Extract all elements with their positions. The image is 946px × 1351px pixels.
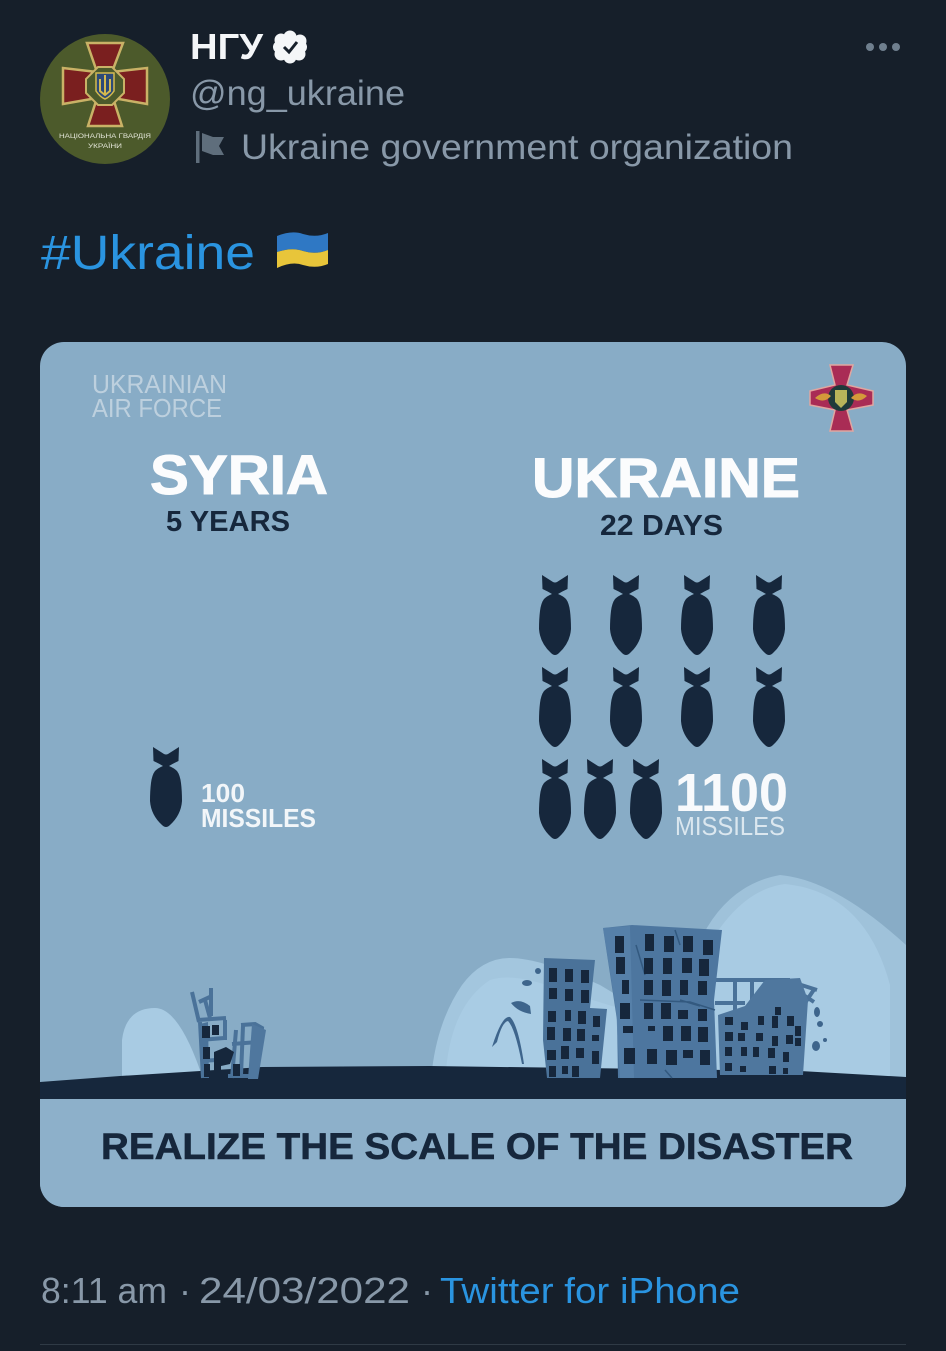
windows: left tower	[547, 968, 600, 1077]
panel: infographic card	[40, 342, 906, 1207]
tweet header	[40, 26, 900, 167]
air force label	[92, 375, 225, 418]
icon: Syria missile	[150, 747, 182, 827]
banner: conclusion	[40, 1132, 906, 1207]
right block	[718, 978, 808, 1075]
central tower	[603, 925, 722, 1078]
label: 100 missiles: 100	[201, 778, 245, 808]
tweet metadata: time and date: 24/03/2022	[199, 1270, 410, 1311]
scene: ground	[40, 1066, 906, 1099]
left tower	[543, 958, 607, 1078]
tweet metadata: time and date: ·	[421, 1270, 433, 1311]
air force label: AIR FORCE	[92, 393, 222, 423]
avatar: National Guard emblem: УКРАЇНИ	[88, 142, 122, 150]
icon: flag	[196, 131, 224, 163]
tweet metadata: source: Twitter for iPhone	[440, 1270, 740, 1311]
icon: Ukrainian flag	[277, 232, 328, 268]
label: 100 missiles	[202, 784, 315, 828]
icon: more menu	[866, 43, 900, 51]
icon: air force emblem	[810, 365, 873, 431]
subheading: 5 years: 5 YEARS	[166, 506, 290, 538]
subheading: 22 days: 22 DAYS	[600, 510, 723, 542]
windows: central tower	[615, 934, 713, 1065]
tweet metadata: time and date	[41, 1270, 433, 1311]
icon: verified badge	[273, 30, 307, 64]
windows: right block	[725, 1007, 801, 1074]
air force label: UKRAINIAN	[92, 369, 227, 399]
account handle: @ng_ukraine	[190, 74, 405, 113]
chart: Ukraine missiles	[539, 575, 785, 839]
heading: Syria: SYRIA	[150, 443, 328, 506]
ruined frame	[713, 980, 817, 1012]
rubble	[492, 968, 827, 1064]
tweet metadata: time and date: 8:11 am	[41, 1270, 167, 1311]
scene: smoke clouds	[122, 875, 906, 1085]
account name: НГУ	[190, 26, 264, 67]
scene: ruined city	[492, 925, 827, 1078]
label: 1100: 1100	[675, 763, 788, 823]
avatar: National Guard emblem	[40, 34, 170, 164]
heading: Ukraine: UKRAINE	[532, 446, 800, 509]
label: missiles: MISSILES	[675, 811, 785, 841]
tweet text: hashtag: #Ukraine	[41, 227, 255, 280]
cracks	[636, 930, 715, 1078]
banner: conclusion: REALIZE THE SCALE OF THE DISASTER	[101, 1126, 853, 1167]
account label: Ukraine government organization	[241, 128, 793, 167]
avatar: National Guard emblem: НАЦІОНАЛЬНА ГВАРДІЯ	[59, 133, 151, 140]
scene: small ruined building	[192, 988, 266, 1079]
label: 100 missiles: MISSILES	[201, 803, 316, 833]
tweet metadata: time and date: ·	[179, 1270, 191, 1311]
